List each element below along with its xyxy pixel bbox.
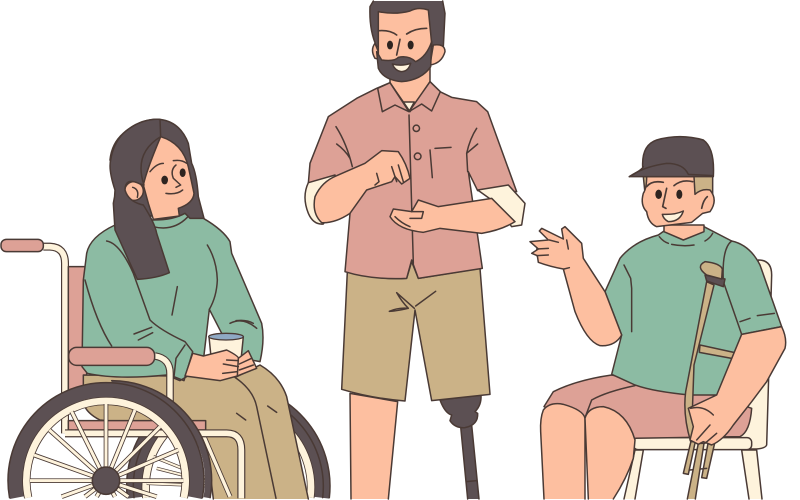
front wheel [8, 381, 212, 498]
woman's trousers [83, 365, 308, 499]
chair [624, 260, 772, 499]
boy's legs [541, 404, 635, 499]
cup [209, 333, 243, 363]
wheelchair upper frame [1, 239, 87, 433]
wheelchair lower frame [65, 421, 241, 498]
boy's cap [629, 137, 714, 177]
woman's hair back [110, 119, 204, 223]
man's leg [350, 393, 398, 499]
boy's raised arm [530, 227, 622, 346]
man's right cuff and arm [390, 185, 525, 233]
standing man with prosthetic leg [305, 1, 525, 499]
seated boy with crutch [530, 137, 786, 499]
man's neck [390, 67, 430, 112]
man's shorts [342, 262, 490, 401]
man's shirt [308, 82, 517, 279]
man's left cuff and arm [305, 151, 410, 224]
back wheel [127, 384, 330, 498]
woman's front hair [110, 119, 169, 279]
boy's arm and hand [688, 327, 786, 445]
woman's head [125, 137, 194, 219]
man's head [370, 1, 445, 82]
prosthetic leg [440, 395, 481, 499]
crutch [683, 262, 738, 499]
boy's head [642, 175, 714, 240]
woman's sweater [82, 213, 263, 381]
boy's shorts [544, 375, 752, 438]
undershirt [402, 102, 414, 112]
armrest [69, 347, 170, 402]
woman's hand [185, 350, 257, 381]
boy's shirt [605, 227, 782, 395]
woman in wheelchair [1, 119, 330, 499]
